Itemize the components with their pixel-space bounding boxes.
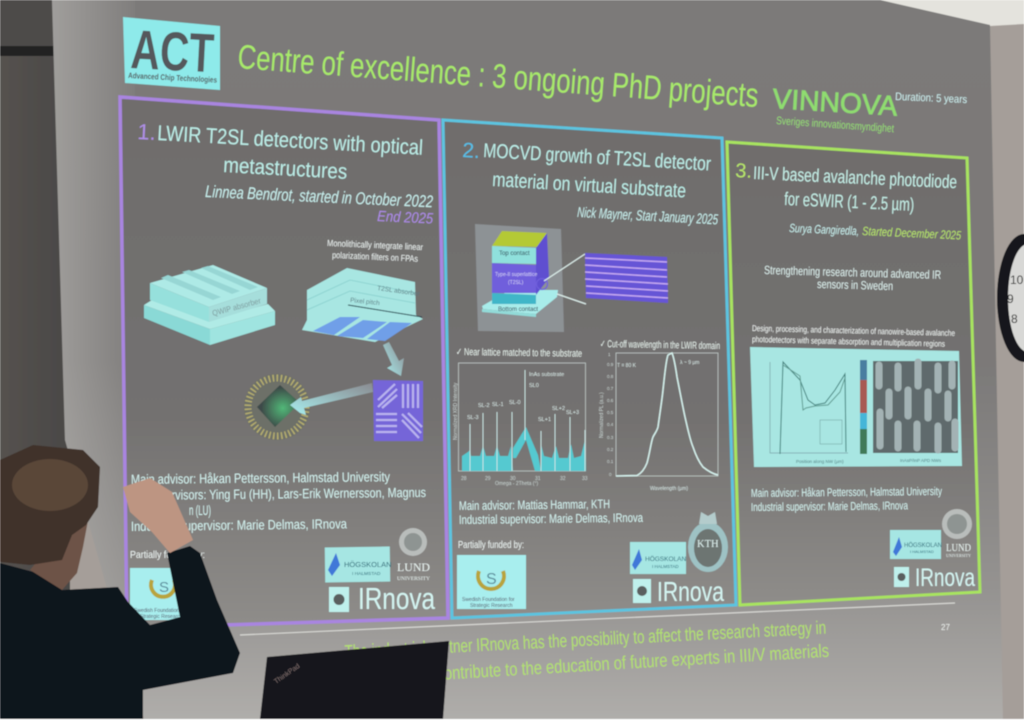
chart: PL wavelength curve: 0.6: [607, 398, 614, 403]
presenter neck: [30, 510, 90, 590]
wall clock: 9: [1007, 292, 1014, 306]
logo: Högskolan i Halmstad: [630, 542, 686, 574]
superlattice stripes: [585, 253, 668, 303]
panel 3 supervisors: Main advisor: Håkan Pettersson, Halmstad University: [751, 486, 942, 500]
device layer stack: Top contact: [499, 251, 530, 257]
panel 2 supervisors: Main advisor: Mattias Hammar, KTH: [459, 497, 610, 513]
panel 3 author: Started December 2025: [862, 224, 962, 242]
logo: IRnova: [894, 564, 975, 592]
logo: Swedish Foundation: S: [486, 571, 497, 588]
logo: ACT Advanced Chip Technologies: Advanced Chip Technologies: [128, 71, 218, 85]
duration note: Duration: 5 years: [895, 91, 968, 106]
logo: Swedish Foundation: Swedish Foundation for: [462, 597, 515, 603]
metasurface filter tile: [373, 380, 423, 441]
logo: Högskolan i Halmstad: I HALMSTAD: [910, 549, 934, 554]
footer statement: [344, 617, 830, 684]
chart: XRD spectrum: SL+2: [552, 406, 565, 412]
device layer stack: Bottom contact: [498, 307, 538, 313]
chart: XRD spectrum: SL-3: [467, 415, 479, 421]
wall clock: 10: [1010, 273, 1024, 287]
chart: PL wavelength curve: [599, 352, 718, 492]
logo: Swedish Foundation: Swedish Foundation for: [134, 608, 187, 614]
chart: PL wavelength curve: Normalized PL (a.u.): [599, 392, 605, 438]
logo: Högskolan i Halmstad: [890, 530, 942, 559]
chart: PL wavelength curve: 0.3: [607, 435, 614, 440]
presenter hand: [123, 478, 193, 553]
logo: Lund University: UNIVERSITY: [946, 553, 972, 558]
presenter head: [0, 445, 100, 565]
title: Centre of excellence : 3 ongoing PhD projects: [236, 38, 760, 115]
figure caption: photodetectors with separate absorption and multiplication regions: [752, 334, 945, 349]
panel 2 heading: [462, 139, 712, 202]
band profile chart: [770, 362, 848, 464]
chart: XRD spectrum: InAs substrate: [529, 372, 564, 378]
chart: PL wavelength curve: λ ~ 9 µm: [680, 360, 699, 366]
logo: Vinnova: Sveriges innovationsmyndighet: [776, 115, 894, 135]
panel 3 body text: sensors in Sweden: [817, 277, 893, 293]
panel 3 heading: for eSWIR (1 - 2.5 µm): [784, 188, 915, 215]
chart: PL wavelength curve: 1: [608, 352, 611, 357]
logo: IRnova: IRnova: [657, 576, 724, 607]
QWIP absorber block: QWIP absorber: [211, 296, 262, 318]
QWIP absorber block: [144, 265, 275, 345]
panel 3 body text: Strengthening research around advanced IR: [764, 263, 941, 282]
logo: KTH: KTH: [697, 539, 719, 550]
panel 1 heading: 1.: [137, 119, 156, 145]
chip on package: [244, 374, 310, 440]
logo: KTH: [688, 512, 728, 572]
check: cut-off wavelength: ✓ Cut-off wavelength in the LWIR domain: [600, 339, 720, 352]
panel 1 supervisors: Co-supervisors: Ying Fu (HH), Lars-Erik Wernersson, Magnus: [131, 485, 426, 503]
screen left highlight: [52, 0, 145, 722]
panel 3 heading: 3.: [735, 160, 752, 183]
footer statement: The industrial partner IRnova has the possibility to affect the research strategy in: [344, 617, 827, 662]
presenter: [0, 445, 240, 719]
chart: XRD spectrum: 33: [582, 476, 588, 482]
logo: Högskolan i Halmstad: [325, 547, 392, 582]
panel 3: III-V avalanche photodiode: [727, 142, 980, 605]
chart: XRD spectrum: [453, 363, 588, 487]
laptop: ThinkPad: [273, 663, 301, 686]
chart: PL wavelength curve: 0.4: [607, 422, 614, 427]
logo: IRnova: [633, 576, 724, 607]
figure: band profile and SEM: InAsP/InP APD NWs: [900, 458, 942, 463]
panel 1 supervisors: Main advisor: Håkan Pettersson, Halmstad University: [131, 469, 390, 487]
chart: XRD spectrum: 31: [535, 476, 541, 482]
panel 3 body text: [764, 263, 941, 293]
bottom photo edge: [0, 719, 1024, 722]
panel 1 author: Linnea Bendrot, started in October 2022: [205, 182, 434, 211]
panel 3 author: [789, 221, 962, 242]
logo: Swedish Foundation: S: [159, 579, 169, 596]
panel 2 heading: material on virtual substrate: [492, 169, 687, 202]
logo: Högskolan i Halmstad: I HALMSTAD: [352, 571, 381, 577]
figure caption: Design, processing, and characterization of nanowire-based avalanche: [752, 323, 955, 338]
panel 2 supervisors: Industrial supervisor: Marie Delmas, IRnova: [459, 511, 643, 527]
logo: Högskolan i Halmstad: I HALMSTAD: [652, 564, 679, 569]
logo: Högskolan i Halmstad: HÖGSKOLAN: [645, 555, 686, 563]
T2SL absorber block: T2SL absorber: [377, 285, 421, 298]
check: lattice matched: ✓ Near lattice matched to the substrate: [456, 347, 582, 360]
wall clock: 8: [1011, 312, 1018, 326]
diagram caption: [327, 238, 423, 264]
logo: Vinnova: VINNOVA: [772, 83, 899, 122]
T2SL absorber block: [302, 268, 423, 342]
footer statement: contribute to the education of future experts in III/V materials: [436, 640, 830, 684]
panel 1: LWIR T2SL detectors: [120, 97, 448, 628]
logo: Swedish Foundation: Strategic Research: [470, 603, 513, 609]
chart: XRD spectrum: SL-1: [492, 402, 504, 408]
panel 1 supervisors: Industrial supervisor: Marie Delmas, IRnova: [131, 516, 347, 534]
logo: ACT Advanced Chip Technologies: ACT: [129, 18, 216, 84]
chart: XRD spectrum: Normalized XRD Intensity: [453, 382, 459, 440]
panel 2 heading: MOCVD growth of T2SL detector: [483, 140, 712, 176]
device layer stack: [475, 224, 564, 332]
logo: IRnova: IRnova: [358, 581, 436, 616]
figure: band profile and SEM: [750, 347, 962, 467]
panel 1 heading: LWIR T2SL detectors with optical: [157, 121, 424, 160]
panel 2 supervisors: [459, 497, 643, 527]
laptop: [260, 641, 449, 719]
wall clock: [997, 234, 1024, 362]
panel 1 heading: [137, 119, 424, 184]
panel 2: MOCVD growth: [443, 120, 736, 618]
device layer stack: (T2SL): [508, 280, 524, 286]
logo: Lund University: LUND: [946, 543, 971, 554]
logo: Lund University: [397, 528, 430, 582]
panel 3 heading: [735, 160, 958, 215]
diagram caption: polarization filters on FPAs: [332, 250, 419, 264]
panel 2 author: Nick Mayner, Start January 2025: [577, 205, 719, 228]
presenter jacket: [0, 546, 240, 719]
panel 3 heading: III-V based avalanche photodiode: [753, 162, 958, 192]
panel 1 supervisors: n (LU): [189, 503, 211, 518]
chart: XRD spectrum: SL-2: [478, 403, 490, 409]
band profile chart: Position along NW (µm): [796, 459, 844, 464]
layer colour bar: [860, 360, 867, 454]
chart: XRD spectrum: SL+3: [566, 410, 579, 416]
logo: ACT Advanced Chip Technologies: [123, 17, 220, 90]
panel 1 funding label: Partially funded by:: [130, 549, 205, 561]
page number: 27: [941, 623, 950, 632]
chart: XRD spectrum: 28: [461, 476, 467, 482]
T2SL absorber block: Pixel pitch: [350, 297, 380, 307]
chart: PL wavelength curve: 0.8: [607, 374, 614, 379]
presenter hair highlight: [12, 459, 88, 511]
chart: PL wavelength curve: T = 80 K: [617, 363, 637, 369]
logo: IRnova: [329, 581, 436, 616]
chart: XRD spectrum: 29: [485, 476, 491, 482]
diagram caption: Monolithically integrate linear: [327, 238, 423, 252]
chart: XRD spectrum: Omega - 2Theta (°): [495, 481, 538, 487]
logo: Swedish Foundation: Strategic Research: [140, 614, 183, 620]
chart: XRD spectrum: SL0: [529, 383, 539, 389]
device layer stack: Type-II superlattice: [495, 272, 537, 278]
chart: XRD spectrum: 32: [560, 476, 566, 482]
arrow: block to metasurface: [383, 342, 404, 376]
SEM nanowire image: [873, 361, 958, 453]
chart: PL wavelength curve: 0.7: [607, 386, 614, 391]
panel 3 supervisors: [751, 486, 942, 514]
logo: Lund University: LUND: [397, 562, 430, 574]
logo: Swedish Foundation: [130, 568, 192, 620]
figure caption: [752, 323, 955, 349]
panel 3 author: Surya Gangiredla,: [789, 221, 859, 238]
logo: Högskolan i Halmstad: HÖGSKOLAN: [904, 542, 942, 549]
chart: XRD spectrum: SL+1: [538, 417, 551, 423]
chart: PL wavelength curve: Wavelength (µm): [650, 486, 688, 492]
panel 1 supervisors: [131, 469, 426, 534]
chart: XRD spectrum: SL-0: [509, 400, 521, 406]
panel 2 funding label: Partially funded by:: [458, 539, 524, 551]
arrow: tile to chip: [290, 383, 373, 415]
chart: PL wavelength curve: 0.2: [607, 447, 614, 452]
chart: PL wavelength curve: 0.9: [607, 362, 614, 367]
chart: PL wavelength curve: 0.5: [607, 410, 614, 415]
logo: IRnova: IRnova: [915, 564, 975, 592]
logo: Swedish Foundation: [457, 555, 526, 609]
panel 1 end date: End 2025: [377, 208, 434, 228]
chart: XRD spectrum: 30: [510, 476, 516, 482]
chart: PL wavelength curve: 0.1: [607, 459, 614, 464]
footer rule: [240, 603, 955, 635]
panel 1 heading: metastructures: [223, 153, 348, 184]
zoom lines: [544, 254, 586, 304]
panel 3 supervisors: Industrial supervisor: Marie Delmas, IRnova: [751, 500, 908, 514]
panel 2 heading: 2.: [462, 139, 481, 163]
chart: PL wavelength curve: 0: [609, 472, 612, 477]
logo: Högskolan i Halmstad: HÖGSKOLAN: [344, 560, 392, 569]
logo: Lund University: UNIVERSITY: [397, 576, 430, 582]
logo: Lund University: [942, 509, 972, 558]
